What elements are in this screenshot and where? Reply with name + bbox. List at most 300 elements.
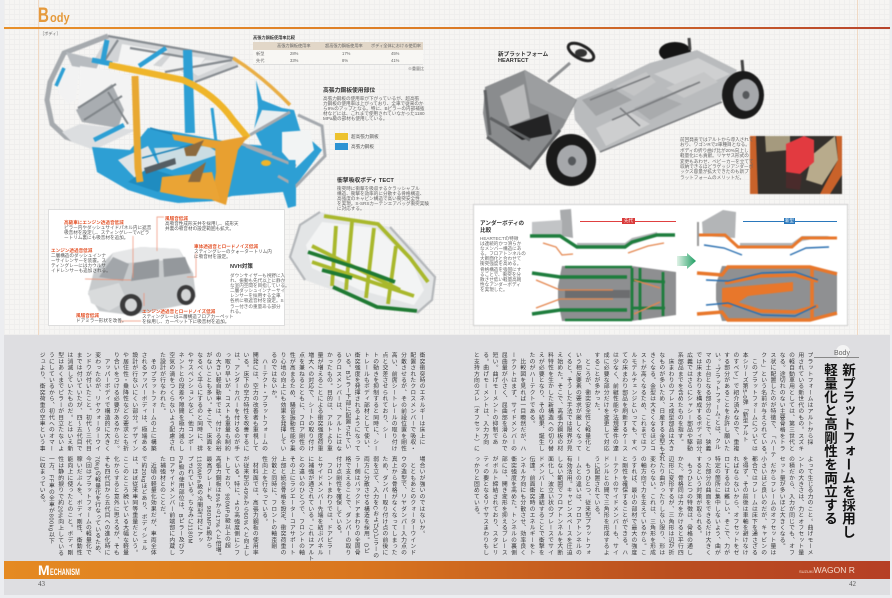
text block: NVH measures: れ、振動も先代以上に静か (230, 278, 285, 283)
body text: right page upper: では床まわりを構成するボディ部分、 (695, 352, 701, 458)
left margin line (38, 0, 39, 335)
callout: wind noise: 井裏の吸音材の設定範囲も拡大。 (165, 226, 234, 231)
footer logo: MECHANISM (38, 562, 80, 578)
body text: right page lower: セット量が多いほど大きくなる。 (778, 456, 784, 549)
body text: left page lower: 分散と同時に、フロントの軸歪剛 (270, 456, 276, 549)
text block: underbody comparison: ることで、衝突を分 (480, 272, 521, 277)
body text: left page lower: ている。特に、より高強度側にシフ (233, 456, 239, 556)
text block: underbody comparison: を実現した。 (480, 287, 508, 292)
body text: right page upper: 屈曲量が小さく、屈曲部を滑らかで (500, 352, 506, 452)
body text: left page upper: 空気の渦をつくらないよう配慮され (168, 352, 174, 452)
body text: right page lower: よって生じる力のこと。曲げモーメ (806, 456, 812, 556)
body text: left page upper: は消滅していたものだ。とはいえ新 (66, 352, 72, 452)
text block: TECT: 衝突時に衝撃を吸収するクラッシャブル (337, 186, 420, 191)
body text: left page upper: 高い、前席シートレールの取り付け (390, 352, 396, 452)
table row: previous (253, 57, 423, 65)
body text: right page lower: もうひとつ、従来型プラットフォ (584, 462, 590, 556)
body text: left page lower: は、ほぼ従来車同等重量だという。 (131, 456, 137, 556)
body text: right page upper: え始めた。そこで、高張力鋼板の材 (556, 352, 562, 452)
label: new model: 新型 (785, 218, 794, 223)
body text: right page lower: ーテクトのサイドメンバーも、サイ (611, 456, 617, 556)
section heading: Body: ody (50, 10, 70, 25)
body text: left page lower: ウの造型で、リヤダンパー入力点の (399, 456, 405, 556)
body text: left page lower: 70kgの軽量化を行なっているため、 (94, 456, 100, 557)
callout: high-end engine noise: 吸音材を設定し、スティングレーでAピラ (64, 230, 149, 235)
text block: NVH measures (230, 262, 290, 314)
body text: right page upper: と支持方向のズレ（オフセット）に (472, 352, 478, 452)
body text: right page upper: 床まわりのプレス成型部品は大き (667, 358, 673, 452)
body text: right page lower: っかりと固めている。 (472, 456, 478, 518)
body text: right page lower: ロにするのは難しい。そこで、力が (723, 456, 729, 556)
footer logo: MECHANISM: M (38, 562, 50, 578)
body text: left page upper: た設計が行なわれた。 (159, 352, 165, 414)
body text: left page upper: うにしているから、初代へのオマー (47, 352, 53, 452)
text block: NVH measures: ラー付きの重量ある部分 (230, 304, 281, 309)
body text: right page upper: 本シリーズ第5-0弾「新型アルト (741, 352, 747, 442)
body text: right page upper: 比較図を見れば一目瞭然だが、ハ (519, 358, 525, 452)
body text: right page upper: 短い。曲げモーメントの抑制であ (491, 352, 497, 445)
previous side view (530, 209, 675, 255)
illustration: new platform chassis (483, 38, 764, 186)
table title: 高張力鋼板使用率比較 (253, 35, 295, 40)
body text: right page lower: 伝達。前面衝突時のエネルギーをト (528, 456, 534, 556)
body text: left page lower: その上にラジエーターコアサポート (288, 456, 294, 556)
callout: engine noise: ティングレーにはカウルサ (51, 263, 106, 268)
body text: right page lower: の軸方向で力を支えているから。こ (639, 456, 645, 556)
body text: left page upper: がないことも多い。そこで、床面を (205, 352, 211, 452)
body text: right page lower: ティの要となるリヤサスまわりもし (482, 456, 488, 556)
body text: left page upper: 配置されたクロスメンバーで吸収・ (409, 352, 415, 452)
table row: new: 28% (290, 51, 298, 56)
callout: engine and road noise (142, 308, 234, 324)
callout: door mirror: 風騒音低減 (76, 313, 99, 318)
table row: new (253, 50, 423, 58)
text block: platform note: 変更もあわせ、ベビーカーを立てて (680, 159, 754, 164)
text block: high-tensile usage (323, 86, 425, 121)
text block: platform note: おり、ワゴンRで2車種目となる。 (680, 142, 750, 147)
body text: left page lower: プされている。ちなみに1180M (186, 456, 192, 544)
heading: new platform HEARTECT: 新プラットフォーム (498, 52, 548, 58)
vertical headline: 新プラットフォームを採用し (840, 363, 855, 538)
underbody panel background (474, 204, 848, 326)
text block: platform note: 収納できるほどラゲッジアンダーボ (680, 164, 753, 169)
body text: right page upper: い。"プラットフォーム"とは、クル (713, 352, 719, 450)
callout: engine noise: ーサイレンサーを装置。ス (51, 258, 106, 263)
page number left: 43 (38, 580, 45, 588)
body text: left page lower: 性は静的捩りで約20%向上している (57, 456, 63, 556)
front blue structure (254, 80, 322, 190)
heading: new platform HEARTECT (498, 51, 548, 64)
footer brand: WAGON R: SUZUKIWAGON R (799, 565, 855, 575)
body text: left page lower: ラー側はバックドアまわりの全周骨 (353, 456, 359, 556)
body text: left page lower: ため、ダンパー取り付け点の前後に (381, 456, 387, 556)
body text: right page upper: えが必要となり、その結果、誕生し (537, 352, 543, 452)
text block: platform note: 前回発表ではアルトから導入されて (680, 137, 753, 142)
illustration: high-strength steel body frame (47, 36, 325, 208)
body text: right page lower: ドシルとの間で三角形を形成するよ (602, 456, 608, 556)
body text: left page upper: 分散させるが、その前段位置を剛性 (399, 352, 405, 452)
label: previous model: 先代 (624, 218, 633, 223)
yellow high-strength members (109, 65, 248, 138)
text block: underbody comparison: 大断面化と合わせて (480, 256, 521, 261)
body text: left page lower: に補強が通されている。これはアルト (307, 456, 313, 562)
body text: left page lower: た補強材とのことだ。 (159, 456, 165, 518)
body text: left page lower: 今回はプラットフォームの軽量化で (84, 456, 90, 556)
callout: body and road noise: スティングレーのクォータートリム内 (194, 249, 272, 254)
photo: rear luggage space with stroller (750, 136, 842, 194)
body text: right page lower: だからフレームのオフセット量は (769, 462, 775, 556)
body text: right page upper: 用されている新世代のもの。スズキ (797, 352, 803, 452)
body text: left page lower: 付け点剛性を確保している。 (335, 456, 341, 537)
text block: high-tensile usage: MPa級の部材も使用している。 (323, 116, 387, 121)
new plan view (697, 266, 837, 321)
previous plan view (532, 266, 676, 321)
wheel (722, 71, 764, 119)
callout: engine noise: エンジン透過音低減 (51, 248, 92, 253)
table row: new: 45% (391, 51, 399, 56)
body text: left page lower: 弱を立て、入力をCおよびDピラーの (372, 456, 378, 559)
body text: right page lower: れたり曲がったりしない限り、形は (658, 456, 664, 556)
table note: ※重量比 (408, 66, 424, 71)
text block: high-tensile usage: 高張力鋼板使用部位 (323, 88, 375, 94)
body text: left page lower: 場合いが強いのではないか。 (418, 456, 424, 537)
callout: engine and road noise: エンジン透過音とロードノイズ低減 (142, 309, 215, 314)
body text: left page upper: 点と交差させられており、シー (381, 352, 387, 439)
body text: left page upper: なるべく平らにするのと同時に、排 (196, 352, 202, 452)
body text: right page upper: ーテクトはまず、サイドメンバーの (510, 352, 516, 452)
body text: right page upper: することが多かった。 (593, 352, 599, 414)
text block: TECT (337, 176, 429, 211)
callout: wind noise: 風騒音低減 (165, 216, 188, 221)
text block: TECT: を実現。S-SRSカーテンエアバッグ衝突実験 (337, 201, 429, 206)
text block: underbody comparison: なメンバー構造にあ (480, 246, 521, 251)
legend: ultra high tensile: 超高張力鋼板 (351, 134, 379, 139)
body text: right page upper: のすべて」で紹介済みなので、重複 (732, 352, 738, 452)
text block: underbody comparison: 衝突強度を高める。 (480, 261, 521, 266)
body text: left page lower: 近頃の軽量化効果だが、車両全体 (149, 462, 155, 556)
text block: NVH measures: NVH対策 (230, 264, 253, 270)
table header (253, 42, 423, 50)
body text: left page upper: されるアッパーボディは、極端ある (140, 352, 146, 452)
body text: left page upper: 量が増えることによる衝突強度荷重 (316, 352, 322, 452)
callout: engine noise: 二層構造のダッシュインナ (51, 253, 106, 258)
body text: left page lower: が従来型の49%から60%へと向上し (242, 456, 248, 556)
panel: NVH measures (48, 209, 285, 326)
body text: right page lower: ればならないから、オフセットをゼ (732, 456, 738, 556)
body text: left page lower: 化からすると意外に思えるが、そも (112, 456, 118, 556)
callout: body and road noise: に吸音材を設定。 (194, 254, 231, 259)
text block: platform note: 軽量化にも貢献。リヤサス形式の (680, 153, 749, 158)
wheel (546, 134, 596, 186)
body text: left page upper: までは付いていたが、四〜五代目で (75, 352, 81, 452)
table row: previous: 8% (342, 58, 348, 63)
legend (335, 133, 379, 150)
gray text section background (4, 335, 890, 595)
body text: left page lower: 一方、FF車の全車が800kg以下 (47, 456, 53, 544)
text block: NVH measures: レンサーを採用する全車 (230, 293, 281, 298)
center pillar blue (183, 50, 195, 133)
body text: right page lower: と剛性を確保することができる。ハ (621, 456, 627, 556)
body text: right page lower: の積だから、入力が同じでも、オフ (787, 456, 793, 556)
body text: right page upper: なものが多いため、日産する金型も大 (658, 352, 664, 458)
body text: right page upper: る。曲げモーメントは、入力方向 (482, 352, 488, 445)
body text: right page lower: ンネル方向にも分散させ、効率良く (519, 456, 525, 556)
body text: right page upper: 料特性を生かした新構造への切り替 (547, 352, 553, 452)
text block: NVH measures: れる。 (230, 309, 244, 314)
legend: ultra high tensile (335, 133, 379, 140)
body text: left page upper: 性が高まるため、騒音振動性能や乗 (288, 352, 294, 452)
body text: left page lower: に収まっている。 (38, 456, 44, 506)
body text: left page lower: 能向上に使ったとのこと。ボディ剛 (66, 456, 72, 556)
text block: TECT: 構造、衝撃を効率的に分散する骨格構造、 (337, 191, 424, 196)
body text: right page upper: 広義ではさらにシャシー部品や駆動 (686, 352, 692, 452)
body text: right page upper: の軽自動車用としては、第三世代と (787, 352, 793, 452)
front tube frame (236, 112, 325, 186)
body text: right page upper: 系部品までを含めたものを指す。 (676, 352, 682, 445)
new side view (698, 210, 837, 255)
text block: NVH measures: ダウンサイザーも視野に入 (230, 273, 285, 278)
body text: left page upper: 点を兼ねるとともに、フロア剛性の (298, 352, 304, 452)
table row: new: 17% (342, 51, 350, 56)
table header: 超高張力鋼板使用率 (325, 43, 363, 48)
legend: high tensile: 高張力鋼板 (351, 144, 374, 149)
text block: platform note: ックス容量が拡大できたのも新プ (680, 169, 749, 174)
body text: right page lower: かた。骨格同は力をかけると平行四 (676, 456, 682, 556)
text block: underbody comparison: 骨格構造を強固にす (480, 267, 521, 272)
text block: NVH measures: 各所に吸遮音材を設定。S (230, 298, 284, 303)
body text: right page upper: ての床まわり部品を刷新するケース (621, 352, 627, 452)
section heading: Body: B (38, 4, 49, 27)
vertical headline: 軽量化と高剛性を両立する (822, 363, 837, 525)
body text: right page upper: このプラットフォームについては (750, 358, 756, 452)
body text: left page upper: やサスペンションなど、他コンポー (186, 352, 192, 452)
body text: right page upper: 成に必要な部分だけを変更して対応 (602, 352, 608, 452)
text block: platform note: ラットフォームのメリットだ。 (680, 175, 744, 180)
body text: left page upper: いる。Bピラー下部に配置されてい (344, 352, 350, 450)
body text: right page lower: 小さいほど良いのだが、キャビンの (760, 456, 766, 556)
body text: left page upper: トの動きを抑制すると同時に、シー (372, 352, 378, 452)
body text: right page lower: った部分の曲面をできるだけ大きく (704, 456, 710, 556)
body text: left page lower: で約20kgほどあり、ボディシェル (140, 456, 146, 551)
text block: high-tensile usage: ら9%のアップとなる。特に、Bピラーの内部補強 (323, 106, 424, 111)
badge: Body: Body (834, 350, 850, 357)
body text: left page upper: 型はあくまでピラーが目立たないよ (57, 352, 63, 452)
table row: previous: 33% (290, 58, 298, 63)
body text: left page lower: 最高グレードも、980MPa級から (205, 456, 211, 549)
body text: left page upper: は、アンダーカバーを付けるのが手 (233, 352, 239, 452)
text block: TECT: に対応する。 (337, 206, 365, 211)
body text: left page lower: 1180MPa級の冷間型T材にアッ (196, 456, 202, 543)
body text: right page upper: なる。途切れのない主要骨格をトラ (778, 352, 784, 452)
text block: underbody comparison (480, 220, 526, 292)
text block: underbody comparison: 散させ低い軽量高剛 (480, 277, 521, 282)
header rule (4, 27, 890, 29)
body text: left page upper: ハーテクト・プラットフォームの (260, 358, 266, 452)
body text: left page lower: そも四代目から五代目への進化時に (103, 456, 109, 556)
text block: NVH measures: な室内空間を目指している。 (230, 283, 290, 288)
body text: right page upper (472, 352, 813, 458)
text block: NVH measures: 二層ダッシュインナーサイ (230, 288, 285, 293)
text block: TECT: 高強度のキャビン構造で高い衝突安全性 (337, 196, 420, 201)
illustrations layer (44, 33, 848, 326)
body text: right page upper: いう相反要素の要求が厳しくなって (574, 352, 580, 452)
body text: left page lower: との違いのひとつで、フロントの軸 (298, 456, 304, 556)
body text: right page lower: うすれば、最小の部材で最大の強度 (630, 456, 636, 556)
text block: underbody comparison: 性なアンダーボディ (480, 282, 521, 287)
text block: platform note (680, 136, 754, 180)
body text: left page lower: 性向上を行なっている。 (260, 456, 266, 524)
body text: right page upper: くると、そうした手法では限界が見 (565, 352, 571, 452)
body text: left page lower: 格で支えることで、ダンパーの取り (344, 456, 350, 556)
body text: left page upper: り合いをつける必要があるからだ。 (112, 352, 118, 452)
body text: right page lower: がボルト締結されており、スタビリ (491, 456, 497, 556)
roof lattice (94, 36, 240, 82)
body text: right page upper: する部分があることをお許し願いた (723, 352, 729, 452)
callout: door mirror: ドアミラー形状を改善。 (76, 318, 126, 323)
body text: left page upper: 衝突衝突時のエネルギーは床上に (418, 352, 424, 445)
body text: left page lower: とともあとのクォーターウインド (409, 462, 415, 556)
body text: left page upper: 増大への対応で、シートの取り付け (307, 352, 313, 452)
heading: new platform HEARTECT: HEARTECT (498, 58, 528, 64)
callout: engine and road noise: を採用し、カーペット下に吸音材を追加。 (142, 319, 229, 324)
body text: right page upper: は少なく、前継性能や法規要件の達 (611, 352, 617, 452)
body text: right page lower: ームとの違いは、フロアトンネルの (574, 456, 580, 556)
body text: right page upper: ところが、衝突安全性と軽量化と (584, 358, 590, 452)
body text: left page upper: トレールもボディ部材として使い、 (362, 352, 368, 452)
body text: left page upper: 衝突強度を発揮されるようになって (353, 352, 359, 452)
callout: body and road noise: 車体透過音とロードノイズ低減 (194, 244, 258, 249)
body text: right page lower: するという対策が取られる。 (695, 456, 701, 537)
rear quarter and seat structure (78, 66, 132, 124)
callout: engine and road noise: スティングレーは三層構造フロアカーペット (142, 314, 234, 319)
body text: left page lower: ここのところ続いている大幅な軽量 (122, 456, 128, 556)
body text: right page upper: ルモデルチェンジといっても、すべ (630, 352, 636, 452)
legend: high tensile (335, 143, 374, 150)
body text: left page upper: るクロスメンバーは、アルトにはな (335, 352, 341, 452)
body text: left page upper: や居住性・乗降性などの要求とも折 (122, 352, 128, 452)
body text: left page lower: 高張力鋼板は8%から17%へと倍増。 (214, 456, 220, 559)
body text: left page upper: ンドウが付いたこと。初代〜三代目 (84, 352, 90, 452)
body text: left page upper: 設計が行ないにくい部分。デザイン (131, 352, 137, 452)
body text: left page lower: 上部と統合骨格を設定、衝突荷重の (279, 456, 285, 556)
vertical headline (822, 363, 856, 538)
body text: right page lower: 面化し、波立い状のブレースでサイ (547, 456, 553, 556)
text block: TECT: 衝撃吸収ボディ TECT (337, 178, 394, 184)
callout: high-end engine noise: ピラー内やダッシュサイドパネル内に遮音 (64, 225, 151, 230)
table header: ボディ全体における使用率 (371, 43, 421, 48)
body text: right page upper: クト」という名前が与えられている。 (760, 352, 766, 458)
body text: left page upper: の大きい軽自動車では、付ける余裕 (214, 352, 220, 452)
body text: left page upper: り心地の向上にも効果を発揮してい (279, 352, 285, 452)
text block: underbody comparison: は連続的かつ滑らか (480, 241, 521, 246)
body text: right page lower: 特定の箇所に集中しないよう、曲が (713, 456, 719, 556)
body text: right page upper: ス状に配置したのが特徴で、「ハーテ (769, 352, 775, 458)
text block: underbody comparison: アンダーボディの (480, 221, 524, 227)
body text: right page lower: 部には、開き変形を抑えるブレース (500, 456, 506, 556)
badge: Body (814, 345, 859, 359)
body text: left page lower: フロントまわりでは、ドアピラー (325, 462, 331, 556)
body text: right page lower: を得ず、その前後は車軸を避けなけ (741, 456, 747, 556)
section title: adopting new platform (814, 345, 859, 538)
panel: underbody comparison (480, 218, 837, 292)
text block: platform note: ボディの折り曲げ比が20%向上し (680, 148, 749, 153)
text block: high-tensile usage: 高張力鋼板の使用率が下がっているが、超高張 (323, 96, 419, 101)
body text: right page lower: 有効活用。キャビンスペースを圧迫 (565, 456, 571, 556)
text block: underbody comparison: 比較 (480, 228, 491, 234)
callout: high-end engine noise (64, 220, 152, 240)
body text: left page upper: ジュより、衝突荷重の空車という事 (38, 352, 44, 452)
callout: engine noise: イドレンサーも追加される。 (51, 268, 111, 273)
callout: high-end engine noise: 高級車にエンジン透過音低減 (64, 220, 124, 225)
body text: right page lower: うに配置されている。 (593, 456, 599, 518)
body text: left page upper: いる。床下の空力特性を改善するに (242, 352, 248, 452)
body text: right page upper: たのがハーテクトである。 (528, 352, 534, 427)
table header: 高張力鋼板使用率 (277, 43, 311, 48)
text block: high-tensile usage: 材などには、これまで使用されていなかった1180 (323, 111, 425, 116)
illustration: impact-absorbing body (290, 212, 435, 313)
arrow: previous to new (677, 253, 696, 269)
body text: right page lower: 都合ではフレームは床下を通さざる (750, 456, 756, 556)
table row: new: 新型 (256, 51, 264, 56)
blue lower structure (92, 128, 296, 208)
footer band (4, 561, 890, 579)
body text: right page upper: きくなる。金型は大きくなるほどコ (648, 352, 654, 452)
right margin line (857, 0, 858, 335)
page background with grid (4, 0, 890, 335)
body text: left page upper: 開発には、空力の改善者も重視して (251, 352, 257, 452)
body text: left page lower: とサイドメンバー先端を結ぶパネル (316, 456, 322, 556)
body text: right page lower: ントの大きさは、力とオフセット量 (797, 456, 803, 556)
data table: high-tensile steel usage (253, 35, 424, 71)
rear gate surround (47, 36, 108, 146)
body text: left page upper: かったもの。目的は、アルトより重 (325, 352, 331, 452)
body text: left page lower: 両方に分散させる構造を採用。Dピ (362, 456, 368, 554)
callout: wind noise (165, 216, 239, 231)
text block: underbody comparison: HEARTECTの特徴 (480, 236, 518, 241)
body text: left page lower: ロアサイドメンバー前端部に内蔵し (168, 456, 174, 556)
body text: left page upper: るのではないか。 (270, 352, 276, 402)
body text: left page upper (38, 352, 425, 452)
body text: left page upper: ネントとの段差や隙間を極力減らし (177, 352, 183, 452)
body text: right page lower (472, 456, 813, 556)
callout: high-end engine noise: ートリム裏にも吸音材を追加。 (64, 235, 128, 240)
body text: left page upper: っ取り早いが、コストも重量も制約 (223, 352, 229, 452)
callout: engine noise (51, 248, 111, 273)
page number right: 42 (849, 580, 856, 588)
body text: left page upper: そのプラットフォームの上に構築 (149, 358, 155, 452)
section heading: Body (38, 4, 70, 27)
body text: right page upper: ストが高くなるため、これまではフ (639, 352, 645, 452)
body text: left page upper: アッパーボディで構造的に大きく (103, 358, 109, 452)
body text: right page lower: 衝突強度を高めた。トンネルの裏側 (510, 456, 516, 556)
body text: right page lower: もうひとつの特徴は、骨格の通し (686, 462, 692, 556)
table row: previous: 先代 (256, 58, 264, 63)
callout: door mirror (76, 312, 126, 323)
body text: left page lower: 材料面では、高張力鋼板の使用率 (251, 462, 257, 556)
body text: right page upper: プラットフォームはアルトから採 (806, 352, 812, 445)
callout: wind noise: 高吸音性成形天井を採用し、成形天 (165, 221, 239, 226)
body text: left page lower: Pa級の使用部位は、Bピラー及びフ (177, 456, 183, 555)
text block: underbody comparison: る。フロアトンネルの (480, 251, 526, 256)
body text: left page lower: 真上から骨格がなくなってしまった (390, 456, 396, 556)
table row: previous: 41% (391, 58, 399, 63)
body text: left page lower (38, 456, 425, 562)
text block: high-tensile usage: 力鋼板の使用率は上がっており、全車で従来のか (323, 101, 424, 106)
section subheading: ［ボディ］ (40, 31, 61, 36)
body text: right page lower: ドメンバーと連結することで衝撃を (537, 456, 543, 556)
body text: right page upper: マの土台となる部分のことで、狭義 (704, 352, 710, 452)
body text: right page lower: しない範囲でフロアトンネルを大断 (556, 456, 562, 556)
